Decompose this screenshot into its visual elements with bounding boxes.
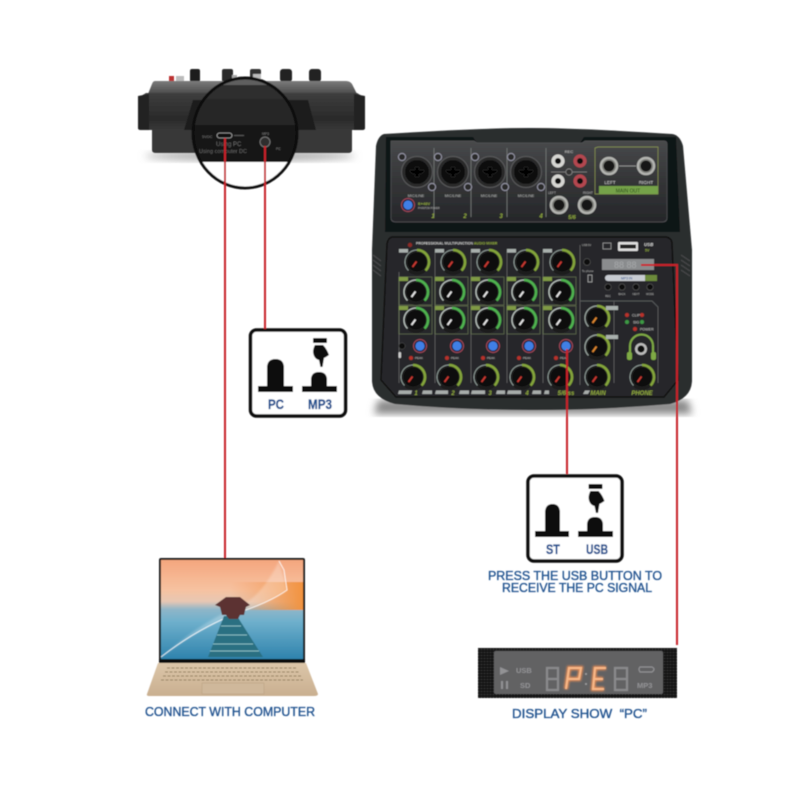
- eq knob rows: [403, 279, 574, 333]
- channel label strip: PHONE: [631, 391, 654, 397]
- channel 5/6 jacks: LEFT: [548, 191, 556, 195]
- blue buttons: [414, 340, 572, 352]
- eq cells: [399, 277, 576, 334]
- mixer outer body: [372, 128, 692, 410]
- magnifier circle: [190, 75, 300, 191]
- eq tags: [399, 277, 552, 310]
- status leds: SIG: [633, 320, 639, 324]
- instruction caption: [488, 568, 662, 595]
- mic line labels: [408, 194, 535, 198]
- channel label strip: 5/6 ss: [558, 391, 575, 397]
- led display: 88 88: [614, 260, 637, 270]
- channel numbers: 1: [431, 214, 435, 220]
- arrow: usb port to computer: [224, 138, 226, 558]
- phantom power button: [402, 198, 440, 212]
- instruction caption: RECEIVE THE PC SIGNAL: [502, 580, 652, 595]
- main out section: [595, 147, 658, 194]
- status leds: POWER: [640, 328, 654, 332]
- usb port area: 5V: [645, 248, 650, 252]
- usb c port and labels: 5VDC: [202, 134, 213, 139]
- channel 5/6 jacks: RIGHT: [583, 191, 593, 195]
- laptop hinge: [159, 659, 305, 663]
- peak leds and labels: PEAK: [523, 356, 531, 360]
- phantom power button: E+48V: [418, 201, 430, 206]
- transport buttons: NEXT: [633, 292, 640, 296]
- PC label: PC: [268, 396, 284, 412]
- peak leds and labels: PEAK: [560, 356, 568, 360]
- laptop screen: [161, 560, 303, 659]
- transport buttons: [605, 284, 654, 298]
- led display: [602, 259, 654, 270]
- ST button: [535, 504, 569, 537]
- main out section: RIGHT: [639, 180, 653, 185]
- USB label: USB: [586, 541, 608, 557]
- mixer top-down photo: [372, 128, 692, 414]
- keyboard: [161, 668, 303, 680]
- headphone icon: [627, 335, 656, 360]
- transport buttons: REC: [605, 294, 611, 298]
- channel label strip: 4: [524, 391, 529, 397]
- brand heading: PROFESSIONAL MULTIFUNCTION AUDIO MIXER: [416, 242, 498, 246]
- bluetooth mode strip: [605, 275, 657, 281]
- ST label: ST: [546, 541, 560, 557]
- transport buttons: BACK: [618, 292, 626, 296]
- rear shadow: [145, 151, 355, 161]
- rear main body: [138, 93, 365, 130]
- usb port area: [582, 242, 654, 282]
- channel label strip: 3: [488, 391, 492, 397]
- peak leds and labels: PEAK: [487, 356, 495, 360]
- display close-up: [478, 648, 677, 698]
- pier hut: [215, 597, 250, 619]
- laptop lid: [159, 558, 305, 663]
- rear side blocks: [138, 94, 365, 130]
- channel numbers: 4: [538, 214, 543, 220]
- laptop base: [147, 663, 318, 696]
- channel numbers: 3: [499, 214, 503, 220]
- display separator dots: [585, 673, 587, 685]
- display left legends: SD: [520, 681, 531, 690]
- main out section: LEFT: [604, 180, 616, 185]
- display right legends: MP3: [637, 681, 652, 690]
- rear port bay frame: [385, 137, 680, 232]
- channel label strip: 1: [414, 391, 418, 397]
- unlit digits: [547, 668, 627, 690]
- rear lower body: [152, 128, 352, 153]
- usb c port and labels: [199, 133, 247, 155]
- rear upper slab: [148, 81, 357, 94]
- bluetooth mode strip: MP3 IN: [621, 276, 633, 280]
- channel 5/6 jacks: 5/6: [568, 215, 577, 221]
- mode knob: MP3: [262, 132, 269, 136]
- instruction caption: PRESS THE USB BUTTON TO: [488, 568, 662, 583]
- peak leds and labels: [409, 356, 568, 360]
- hand pointer: [588, 484, 604, 513]
- peak leds and labels: PEAK: [451, 356, 459, 360]
- main and monitor knobs: [584, 305, 655, 390]
- PC button: [258, 359, 293, 392]
- mixer shadow: [374, 400, 692, 414]
- laptop caption: CONNECT WITH COMPUTER: [145, 704, 315, 719]
- icon: switch ST USB: [528, 476, 622, 561]
- icon: switch PC MP3: [250, 330, 346, 416]
- main out section: MAIN OUT: [616, 188, 640, 194]
- top connectors: [169, 69, 321, 82]
- arrow: usb button to switch: [566, 349, 568, 474]
- mic line labels: MIC/LINE: [445, 194, 462, 198]
- MP3 button pressed: [302, 372, 337, 392]
- rear view of mixer: [138, 69, 365, 191]
- status leds: CLIP: [632, 314, 641, 318]
- mic line labels: MIC/LINE: [408, 194, 425, 198]
- illustration group: [138, 69, 692, 721]
- usb port area: USB 5V: [582, 243, 591, 247]
- level knob row: [400, 364, 573, 390]
- connector lines: [225, 138, 677, 645]
- display right legends: [637, 667, 654, 690]
- panel: input ports: [391, 141, 667, 222]
- rec rca jacks: REC: [565, 149, 573, 154]
- gain tags: [399, 249, 552, 253]
- lit PC digits: [566, 668, 606, 689]
- channel 5/6 jacks: [548, 191, 596, 221]
- MP3 label: MP3: [308, 396, 332, 412]
- display left legends: [500, 666, 532, 690]
- protective film: [161, 561, 287, 657]
- mode knob: PC: [276, 147, 281, 151]
- USB button pressed: [578, 517, 613, 537]
- arrow: knob to switch: [264, 146, 266, 329]
- laptop: [147, 558, 318, 696]
- panel: control surface: [373, 237, 690, 397]
- display left legends: USB: [516, 666, 532, 675]
- arrow: display to close-up: [641, 265, 677, 645]
- status leds: [625, 313, 654, 332]
- pier walkway: [208, 616, 263, 657]
- mic line labels: MIC/LINE: [481, 194, 498, 198]
- combo inputs: [398, 153, 545, 191]
- channel label strip: [398, 390, 654, 397]
- display caption: DISPLAY SHOW “PC”: [512, 706, 647, 721]
- peak leds and labels: PEAK: [415, 356, 423, 360]
- transport buttons: MODE: [646, 292, 654, 296]
- channel numbers: 2: [462, 214, 467, 220]
- rec rca jacks: [551, 149, 587, 188]
- usb port area: To phone: [582, 269, 594, 273]
- channel label strip: 2: [450, 391, 455, 397]
- mode knob: [260, 132, 281, 151]
- gain knob row: [404, 249, 575, 275]
- usb port area: USB: [644, 242, 654, 247]
- channel label strip: MAIN: [590, 391, 606, 397]
- usb c port and labels: Using computer DC: [199, 149, 247, 155]
- rear recess: [184, 100, 316, 130]
- section outlines: [399, 245, 658, 385]
- hand pointer: [313, 338, 329, 367]
- side vents: [373, 255, 690, 276]
- mic line labels: MIC/LINE: [518, 194, 535, 198]
- usb c port and labels: Using PC: [216, 142, 242, 148]
- channel numbers: [431, 214, 543, 220]
- brand heading: [408, 242, 498, 247]
- trackpad: [202, 683, 264, 694]
- phantom power button: PHANTOM POWER: [418, 207, 440, 210]
- microphone socket: [398, 343, 405, 358]
